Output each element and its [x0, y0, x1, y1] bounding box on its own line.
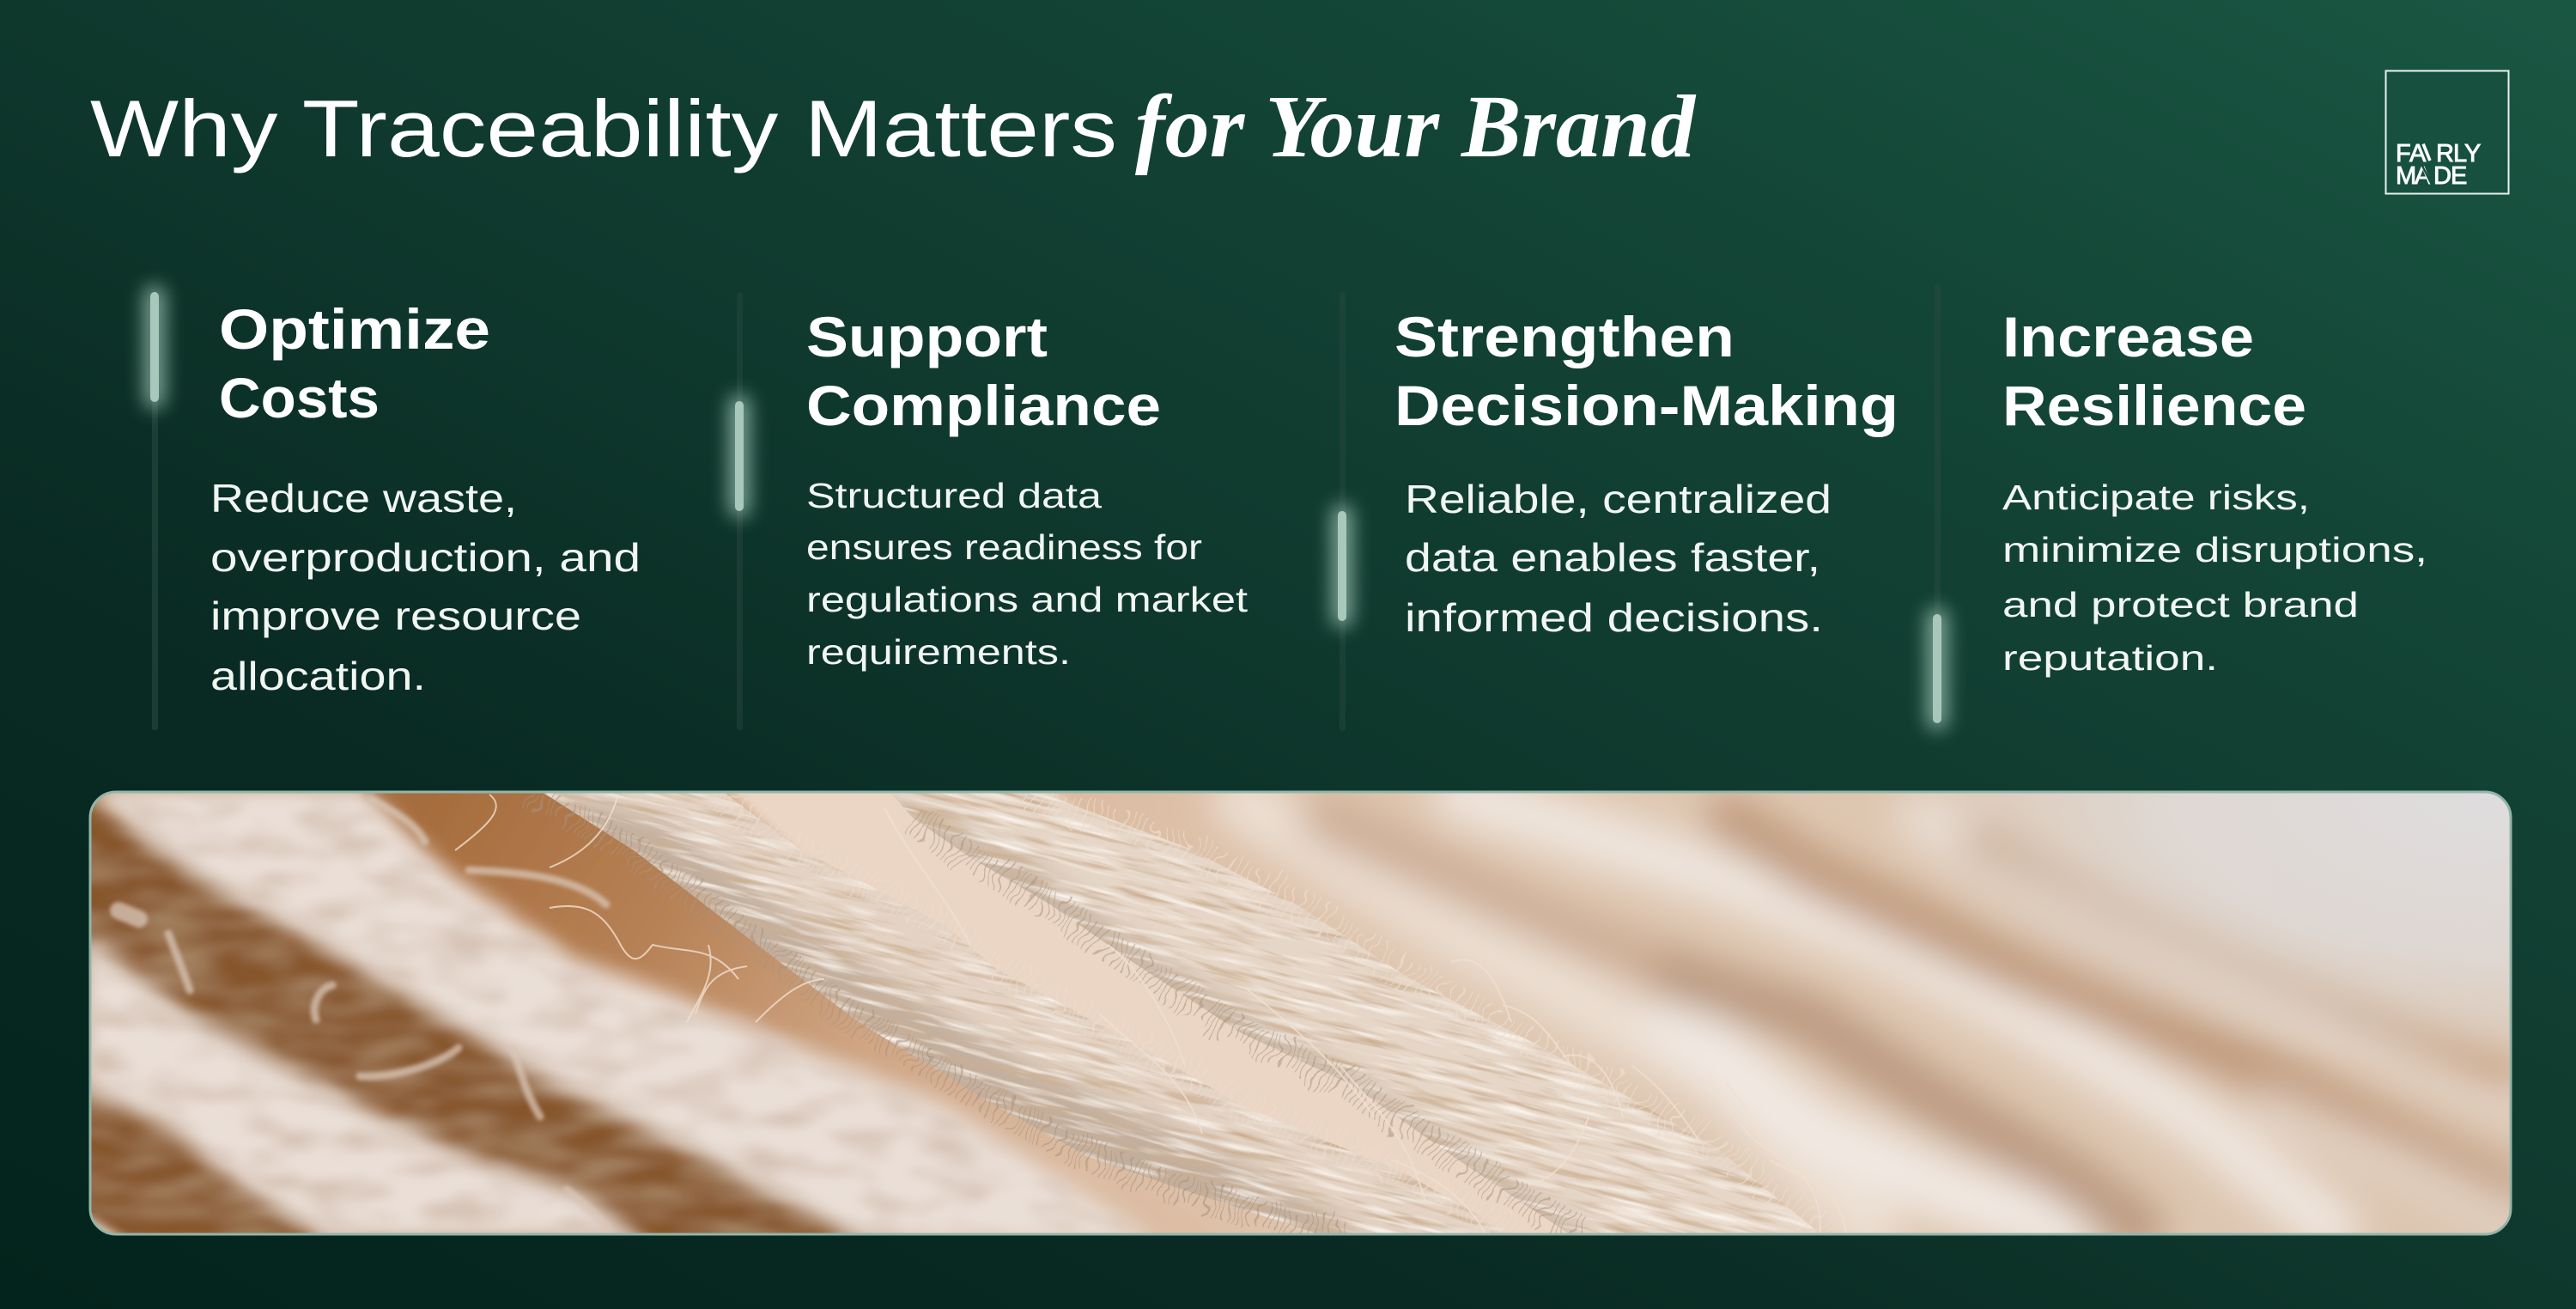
soft blurred fibres over the brown shadow — [118, 799, 610, 1233]
body text: Reduce waste, — [210, 476, 517, 521]
body text: regulations and market — [806, 580, 1249, 619]
heading — [806, 305, 1161, 437]
body text: requirements. — [806, 632, 1071, 672]
title: for Your Brand — [1135, 77, 1697, 176]
body text: reputation. — [2002, 638, 2218, 678]
body text: improve resource — [210, 594, 581, 638]
body text: minimize disruptions, — [2002, 530, 2427, 569]
logo: Fairly Made — [2385, 70, 2509, 194]
body text: overproduction, and — [210, 535, 641, 580]
heading — [219, 297, 490, 429]
sharp rope D — [892, 794, 1819, 1233]
title: Why Traceability Matters — [90, 83, 1117, 174]
photo: close-up of twisted natural fibre ropes — [89, 790, 2512, 1235]
body text — [806, 476, 1249, 672]
panel: support compliance — [729, 292, 1249, 730]
blurred foreground strand B — [82, 934, 644, 1241]
body text — [2002, 478, 2427, 678]
logo: Fairly Made: FAIRLY — [2396, 139, 2481, 167]
peach gap between sharp ropes — [715, 777, 1597, 1241]
heading: Optimize — [219, 297, 490, 361]
progress track and glowing marker — [729, 292, 750, 730]
panel: strengthen decision-making — [1332, 292, 1899, 731]
progress track and glowing marker — [144, 285, 165, 730]
stray hair fibres — [455, 795, 1846, 1233]
heading: Strengthen — [1394, 305, 1735, 368]
title — [90, 77, 1697, 176]
fuzzy rope edges — [532, 795, 1829, 1237]
heading: Compliance — [806, 374, 1161, 437]
body text: informed decisions. — [1405, 595, 1823, 640]
body text — [1405, 477, 1832, 640]
progress track and glowing marker — [1927, 284, 1947, 730]
body text: Anticipate risks, — [2002, 478, 2310, 517]
heading: Costs — [219, 366, 380, 429]
heading — [1394, 305, 1899, 437]
body text: data enables faster, — [1405, 535, 1820, 580]
body text: ensures readiness for — [806, 527, 1202, 567]
body text: Reliable, centralized — [1405, 477, 1832, 521]
sharp rope C — [544, 794, 1505, 1233]
heading: Resilience — [2002, 374, 2306, 437]
warm brown gap between left strands and rope — [361, 794, 1015, 1127]
bottom-left corner fibre — [92, 1213, 128, 1233]
body text: Structured data — [806, 476, 1102, 515]
heading — [2002, 305, 2306, 437]
photo frame — [90, 792, 2511, 1234]
blurred foreground strand A — [90, 786, 1155, 1241]
dark brown shadow region — [91, 806, 874, 1233]
body text: allocation. — [210, 654, 426, 698]
body text: and protect brand — [2002, 585, 2359, 624]
body text — [210, 476, 641, 698]
logo: Fairly Made: MADE — [2396, 162, 2467, 190]
panel: optimize costs — [144, 285, 641, 730]
heading: Increase — [2002, 305, 2254, 368]
heading: Support — [806, 305, 1048, 368]
panel: increase resilience — [1927, 284, 2427, 730]
heading: Decision-Making — [1394, 374, 1899, 437]
far-right blurred rope stripes — [1242, 795, 2512, 1228]
progress track and glowing marker — [1332, 292, 1352, 731]
